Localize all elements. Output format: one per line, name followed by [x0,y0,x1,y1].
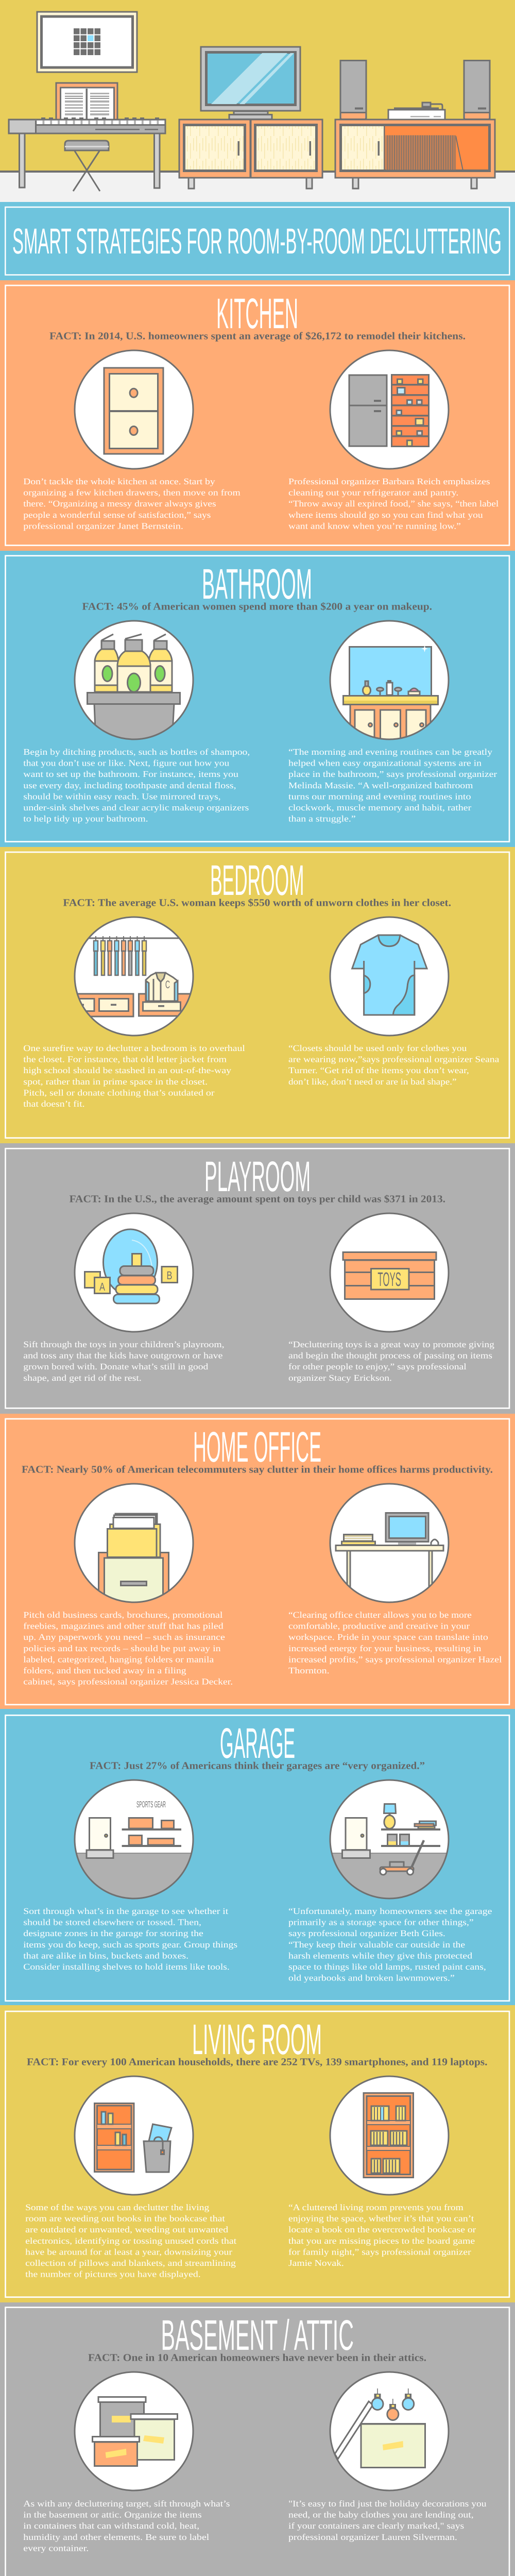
left text: kitchen: organizing a few kitchen drawers, then move on from [23,488,241,498]
left text: kitchen [23,477,241,531]
speakers [340,61,490,118]
right text: bedroom: don’t like, don’t need or are in bad shape.” [288,1077,456,1087]
left text: bedroom: the closet. For instance, that old letter jacket from [23,1055,227,1064]
left text: living room: collection of pillows and blankets, and streamlining [25,2258,236,2268]
left text: bathroom: should be within easy reach. Use mirrored trays, [23,791,221,801]
icon: garage shelves: SPORTS GEAR [136,1800,166,1809]
panel: living room: LIVING ROOM [192,2015,322,2063]
right text: garage: “Unfortunately, many homeowners see the garage [288,1906,492,1916]
right text: garage: space to things like old lamps, rusted paint cans, [288,1962,486,1972]
icon: closet [67,917,196,1036]
icon: fridge and pantry [330,350,449,469]
fact: playroom: FACT: In the U.S., the average amount spent on toys per child was $371 in 2013. [70,1193,445,1205]
right text: bathroom [288,747,497,824]
right text: garage: old yearbooks and broken lawnmowers.” [288,1973,455,1983]
left text: playroom: shape, and get rid of the rest. [23,1373,142,1383]
icon: bookcase and bucket [75,2076,193,2195]
right text: bathroom: “The morning and evening routines can be greatly [288,747,493,757]
right text: basement: professional organizer Lauren Silverman. [288,2532,457,2542]
panel: playroom [0,1143,515,1414]
fact: basement: FACT: One in 10 American homeowners have never been in their attics. [88,2352,426,2364]
left text: playroom [23,1340,225,1383]
right text: kitchen: cleaning out your refrigerator and pantry. [288,488,458,498]
panel: home office: HOME OFFICE [193,1423,321,1471]
left text: bathroom [23,747,250,824]
right text: basement: if your containers are clearly marked," says [288,2521,464,2531]
left text: living room: room are weeding out books in the bookcase that [25,2214,225,2224]
left text: bathroom: that you don’t use or like. Next, figure out how you [23,758,230,768]
right text: garage: says professional organizer Beth Giles. [288,1928,445,1938]
icon: closet: C [165,979,170,991]
left text: home office: freebies, magazines and other stuff that has piled [23,1621,224,1631]
right text: bathroom: than a struggle.” [288,814,356,824]
icon: desk and computer [330,1484,449,1607]
right text: bedroom: are wearing now,”says professional organizer Seana [288,1055,500,1064]
icon: garage with lawnmower [330,1780,449,1899]
right text: kitchen: where items should go so you can find what you [288,510,483,520]
panel: garage [0,1709,515,2005]
fact: bathroom: FACT: 45% of American women spend more than $200 a year on makeup. [82,601,432,612]
icon: bookcase [330,2076,449,2195]
left text: home office: folders, and then tucked away in a filing [23,1666,186,1675]
left text: kitchen: professional organizer Janet Bernstein. [23,521,183,531]
header room illustration [0,0,515,202]
title banner [0,202,515,280]
right text: kitchen: want and know when you’re running low.” [288,521,461,531]
panel: bathroom: BATHROOM [202,560,312,608]
right text: basement [288,2499,487,2542]
left text: basement: As with any decluttering target, sift through what’s [23,2499,230,2509]
panel: garage: GARAGE [220,1719,295,1767]
left text: bedroom: Pitch, sell or donate clothing that’s outdated or [23,1088,215,1097]
panel: kitchen: KITCHEN [216,290,298,337]
left text: garage: Sort through what’s in the garage to see whether it [23,1906,229,1916]
left text: bedroom: high school should be stashed in an out-of-the-way [23,1065,232,1075]
right text: kitchen: Professional organizer Barbara Reich emphasizes [288,477,490,486]
left text: kitchen: there. “Organizing a messy drawer always gives [23,499,216,509]
fact: living room: FACT: For every 100 American households, there are 252 TVs, 139 smartphones, and 119 laptops. [27,2057,487,2068]
right text: living room: for family night,” says professional organizer [288,2247,471,2257]
left text: bedroom [23,1043,245,1109]
panel: playroom: PLAYROOM [204,1153,311,1200]
left text: home office: Pitch old business cards, brochures, promotional [23,1610,223,1620]
right text: basement: "It’s easy to find just the holiday decorations you [288,2499,487,2509]
left text: basement: humidity and other elements. Be sure to label [23,2532,210,2542]
right text: home office: workspace. Pride in your space can translate into [288,1632,488,1642]
left text: garage [23,1906,237,1972]
right text: home office [288,1610,502,1675]
turntable [388,103,445,120]
left text: home office: policies and tax records – should be put away in [23,1643,221,1653]
right text: bathroom: Melinda Massie. “A well-organized bathroom [288,781,473,790]
right text: kitchen: “Throw away all expired food,” she says, “then label [288,499,499,509]
right text: home office: increased profits,” says professional organizer Hazel [288,1654,502,1664]
right text: bathroom: turns our morning and evening routines into [288,791,471,801]
right text: garage: harsh elements while they give this protected [288,1951,473,1960]
fact: home office: FACT: Nearly 50% of American telecommuters say clutter in their home offices harms productivity. [22,1464,493,1476]
left text: garage: items you do keep, such as sports gear. Group things [23,1940,237,1950]
right text: kitchen [288,477,499,531]
left text: home office: up. Any paperwork you need – such as insurance [23,1632,225,1642]
right text: playroom: “Decluttering toys is a great way to promote giving [288,1340,494,1349]
icon: toy box: TOYS [377,1269,401,1291]
right text: bedroom [288,1043,500,1087]
right text: basement: need, or the baby clothes you are lending out, [288,2510,474,2520]
left text: playroom: and toss any that the kids have outgrown or have [23,1351,222,1361]
left text: playroom: Sift through the toys in your children’s playroom, [23,1340,225,1349]
panel: bathroom [0,551,515,847]
right text: bedroom: Turner. “Get rid of the items you don’t wear, [288,1065,469,1075]
right text: garage [288,1906,492,1983]
framed art [37,12,137,72]
left text: bedroom: that doesn’t fit. [23,1099,85,1109]
left text: home office: cabinet, says professional organizer Jessica Decker. [23,1677,233,1687]
right text: home office: Thornton. [288,1666,330,1675]
left text: playroom: grown bored with. Donate what’s still in good [23,1362,209,1371]
left text: home office: labeled, categorized, hanging folders or manila [23,1654,214,1664]
left text: bedroom: One surefire way to declutter a bedroom is to overhaul [23,1043,245,1053]
fact: kitchen: FACT: In 2014, U.S. homeowners spent an average of $26,172 to remodel their kitchens. [49,331,466,342]
icon: toys [75,1213,193,1332]
left text: garage: should be stored elsewhere or tossed. Then, [23,1918,201,1927]
right text: living room: that you are missing pieces to the board game [288,2236,475,2246]
icon: filing cabinet [75,1484,193,1609]
right text: living room: “A cluttered living room prevents you from [288,2202,464,2212]
left text: living room: have be around for at least a year, downsizing your [25,2247,232,2257]
icon: toys: A [99,1280,105,1293]
left text: living room [25,2202,237,2279]
right text: bathroom: helped when easy organizational systems are in [288,758,482,768]
panel: basement and attic [0,2302,515,2576]
television [201,47,300,120]
fact: bedroom: FACT: The average U.S. woman keeps $550 worth of unworn clothes in her closet. [63,897,451,909]
icon: toys: B [167,1269,172,1282]
icon: toy box [330,1213,449,1332]
right text: home office: “Clearing office clutter allows you to be more [288,1610,472,1620]
left text: basement: in containers that can withstand cold, heat, [23,2521,199,2531]
right text: living room: locate a book on the overcrowded bookcase or [288,2225,476,2234]
left text: garage: that are alike in bins, buckets and boxes. [23,1951,188,1960]
right text: living room: enjoying the space, whether it’s that you can’t [288,2214,474,2224]
icon: holiday lights and box [330,2372,449,2490]
right text: garage: primarily as a storage space for other things,” [288,1918,474,1927]
panel: kitchen [0,280,515,551]
left text: garage: designate zones in the garage for storing the [23,1928,203,1938]
panel: bedroom [0,847,515,1143]
icon: drawers [75,350,193,469]
panel: living room [0,2005,515,2302]
right text: bathroom: clockwork, muscle memory and habit, rather [288,803,472,812]
right text: playroom: organizer Stacy Erickson. [288,1373,392,1383]
left text: living room: are outdated or unwanted, weeding out unwanted [25,2225,229,2234]
right text: playroom: and begin the thought process of passing on items [288,1351,492,1361]
right text: bathroom: place in the bathroom,” says professional organizer [288,769,497,779]
panel: home office [0,1414,515,1709]
left text: living room: the number of pictures you have displayed. [25,2269,201,2279]
icon: shampoo bottles [75,621,193,742]
right text: playroom [288,1340,494,1383]
right text: playroom: for other people to enjoy,” says professional [288,1362,467,1371]
left text: living room: Some of the ways you can declutter the living [25,2202,210,2212]
panel: bedroom: BEDROOM [210,856,304,904]
icon: storage containers [75,2372,193,2490]
right text: home office: increased energy for your business, resulting in [288,1643,482,1653]
left text: bathroom: use every day, including toothpaste and dental floss, [23,781,236,790]
right text: bedroom: “Closets should be used only for clothes you [288,1043,467,1053]
right text: home office: comfortable, productive and creative in your [288,1621,470,1631]
right text: living room [288,2202,476,2268]
left text: basement [23,2499,230,2553]
left text: home office [23,1610,233,1687]
stool [65,141,109,191]
left cabinet [179,120,322,189]
right text: garage: “They keep their valuable car outside in the [288,1940,465,1950]
icon: bathroom vanity [330,621,449,746]
left text: bedroom: spot, rather than in prime space in the closet. [23,1077,208,1087]
left text: basement: every container. [23,2543,89,2553]
right text: living room: Jamie Novak. [288,2258,344,2268]
fact: garage: FACT: Just 27% of Americans think their garages are “very organized.” [90,1760,425,1771]
icon: garage shelves [74,1780,194,1899]
left text: kitchen: people a wonderful sense of satisfaction,” says [23,510,211,520]
keyboard [9,117,165,133]
right cabinet with records [335,120,495,189]
left text: garage: Consider installing shelves to hold items like tools. [23,1962,230,1972]
sheet music [56,83,117,120]
left text: bathroom: under-sink shelves and clear acrylic makeup organizers [23,803,249,812]
left text: basement: in the basement or attic. Organize the items [23,2510,202,2520]
left text: bathroom: Begin by ditching products, such as bottles of shampoo, [23,747,250,757]
keyboard table legs [20,133,160,188]
left text: living room: electronics, identifying or tossing unused cords that [25,2236,237,2246]
left text: bathroom: want to set up the bathroom. For instance, items you [23,769,239,779]
icon: t-shirt [330,917,449,1036]
left text: bathroom: to help tidy up your bathroom. [23,814,148,824]
left text: kitchen: Don’t tackle the whole kitchen at once. Start by [23,477,215,486]
